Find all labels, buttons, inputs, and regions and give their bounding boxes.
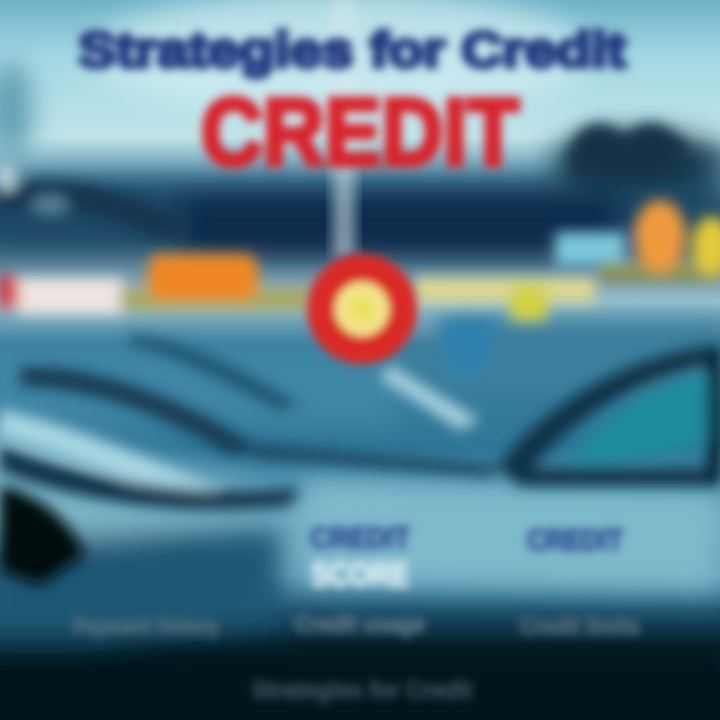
heading: credit: CREDIT	[201, 79, 519, 186]
title: Strategies for Credit	[78, 22, 626, 78]
icon: orange badge left	[148, 254, 258, 300]
icon: yellow badge right	[692, 216, 720, 276]
icon: central target	[307, 254, 417, 364]
caption right: Credit limits	[520, 613, 640, 640]
stat label centre: CREDIT	[310, 522, 410, 555]
stat label right: CREDIT	[527, 524, 623, 557]
icon: orange badge right	[634, 200, 686, 272]
footer: Strategies for Credit	[252, 677, 472, 704]
icon: yellow tab	[510, 285, 548, 321]
caption centre: Credit usage	[295, 611, 425, 638]
timeline ribbon	[0, 200, 720, 321]
caption left: Payment history	[74, 613, 219, 640]
stat value centre: SCORE	[311, 556, 409, 594]
